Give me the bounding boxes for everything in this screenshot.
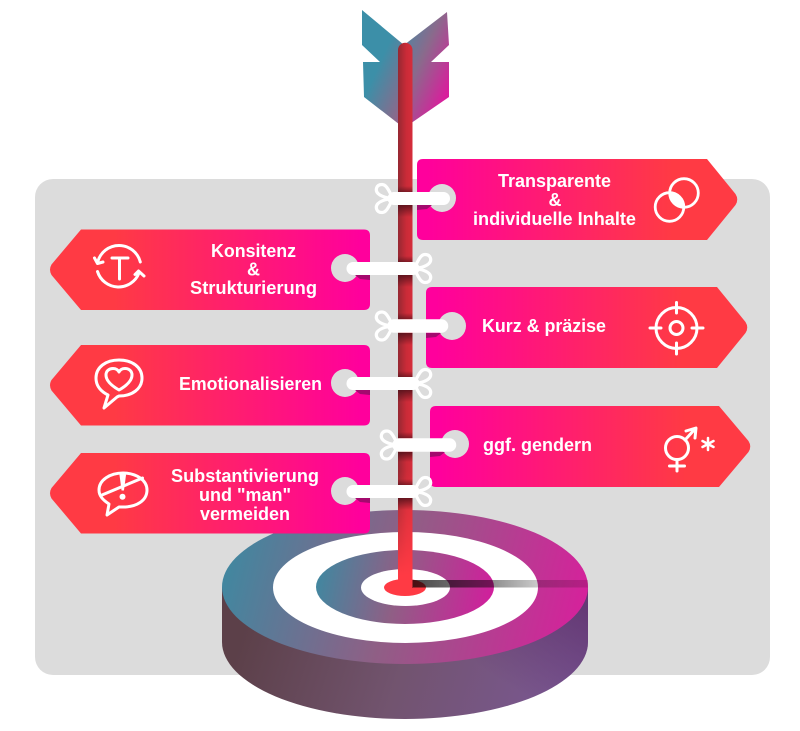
tag text: Emotionalisieren: [179, 374, 322, 394]
tag text: ggf. gendern: [483, 435, 592, 455]
tag text: Kurz & präzise: [482, 316, 606, 336]
tie: ggf. gendern: [381, 431, 450, 459]
tag text: vermeiden: [200, 504, 290, 524]
tag hole: [331, 477, 359, 505]
tag text: &: [247, 260, 260, 280]
icon: gender symbol and asterisk: [666, 428, 714, 471]
tag text: [473, 171, 636, 229]
icon: crosshair: [650, 302, 703, 354]
target: [222, 510, 588, 719]
icon: speech bubble with exclamation mark: [99, 473, 147, 515]
tie shadows on shaft: [398, 186, 412, 510]
arrow shaft: [398, 43, 412, 587]
target side wall: [222, 587, 588, 719]
tie: Transparente: [376, 184, 444, 212]
tag text: Konsitenz: [211, 241, 296, 261]
tag: Substantivierung und "man" vermeiden: [50, 453, 370, 534]
tag: Emotionalisieren: [50, 345, 370, 426]
target bullseye: [384, 579, 426, 596]
tag text: &: [548, 190, 562, 210]
target outer ring: [222, 510, 588, 664]
tag hole: [331, 369, 359, 397]
target inner ring: [316, 550, 494, 624]
tag text: Transparente: [498, 171, 611, 191]
tag hole: [441, 430, 469, 458]
tag hole: [428, 184, 456, 212]
arrow fletching: [362, 10, 449, 128]
icon: T with cycle arrows: [94, 246, 144, 287]
tag hole: [438, 312, 466, 340]
tag text: individuelle Inhalte: [473, 209, 636, 229]
tag text: [171, 466, 319, 524]
tag text: [190, 241, 317, 298]
arrow shadow on target: [412, 580, 588, 588]
tie: Emotionalisieren: [353, 370, 431, 398]
tag hole: [331, 254, 359, 282]
tie: Konsitenz: [353, 254, 431, 282]
target white centre: [361, 569, 450, 606]
icon: speech bubble with heart: [96, 360, 142, 408]
tag text: Strukturierung: [190, 278, 317, 298]
tag: Kurz & präzise: [426, 287, 747, 368]
icon: overlapping circles: [655, 179, 698, 221]
tag: ggf. gendern: [430, 406, 750, 487]
tag text: Substantivierung: [171, 466, 319, 486]
target white ring: [273, 532, 538, 643]
tag: Konsitenz & Strukturierung: [50, 230, 370, 310]
tie: Kurz & präzise: [376, 312, 442, 340]
ties: [353, 184, 450, 506]
tag text: und "man": [199, 485, 291, 505]
tag: Transparente & individuelle Inhalte: [417, 159, 737, 240]
tie: Substantivierung: [353, 478, 431, 506]
background panel: [35, 179, 770, 675]
